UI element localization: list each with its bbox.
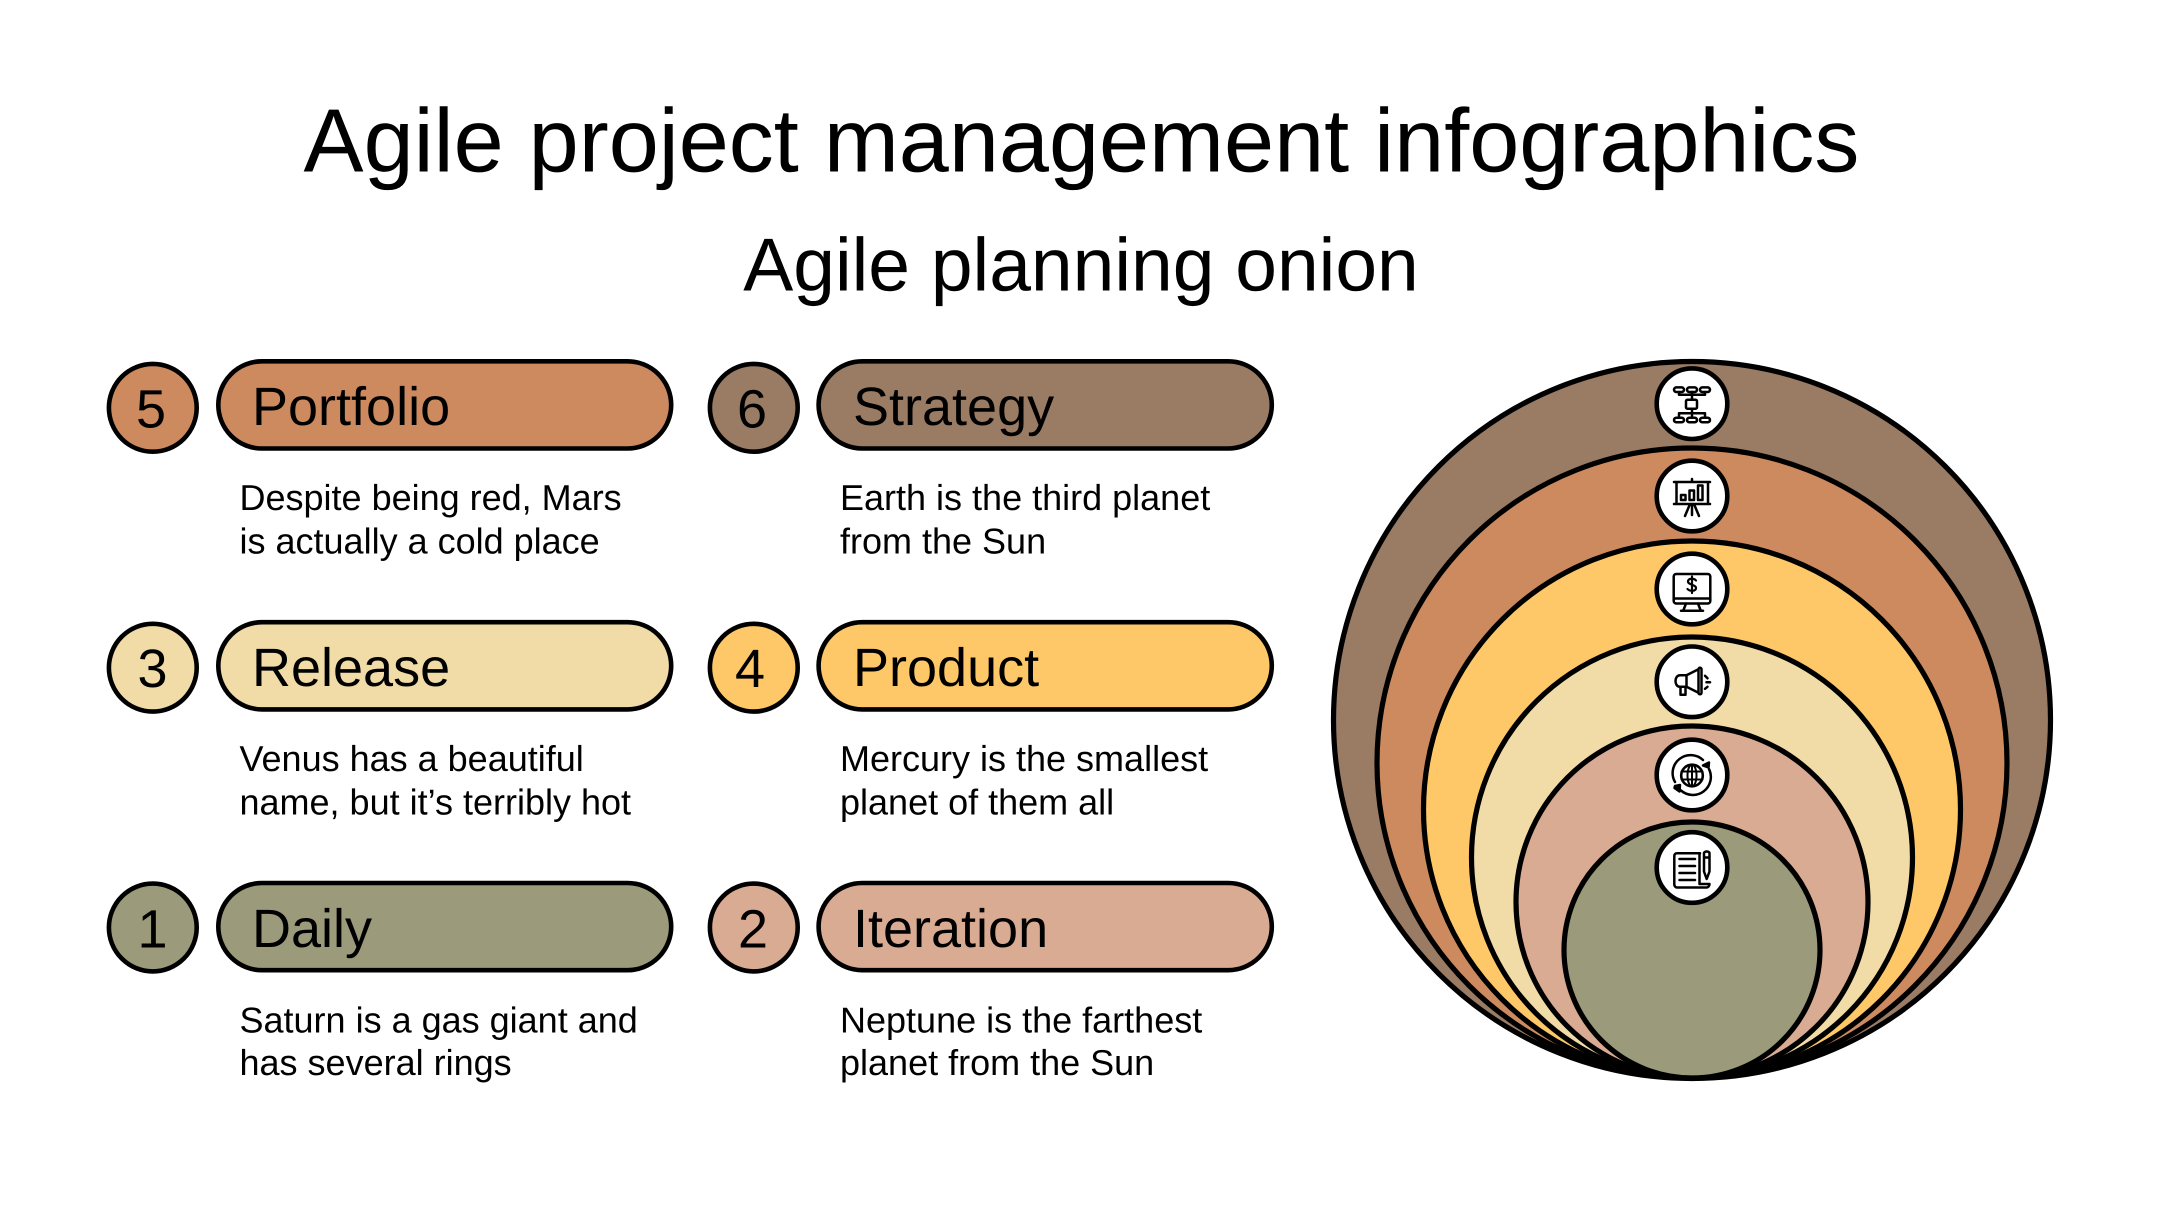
number badge 4: 4	[735, 639, 765, 699]
number badge 5: 5	[136, 380, 166, 440]
number badge 4	[710, 624, 798, 712]
panel: release item	[109, 622, 671, 822]
number badge 2	[710, 884, 798, 971]
number badge 2: 2	[738, 899, 768, 959]
pill: Strategy	[819, 361, 1272, 448]
text: Strategy description: from the Sun	[840, 520, 1046, 562]
chart: planning onion	[1334, 362, 2050, 1078]
pill: Portfolio	[218, 361, 671, 448]
text: Iteration description: Neptune is the farthest	[840, 1000, 1202, 1040]
text: Release description: Venus has a beautiful	[240, 738, 584, 779]
text: Product description: planet of them all	[840, 781, 1114, 822]
panel: iteration item	[710, 883, 1272, 1083]
number badge 1: 1	[137, 899, 168, 959]
title: Agile project management infographics	[304, 92, 1859, 192]
text: Strategy description: Earth is the third planet	[840, 477, 1210, 518]
icon: globe with cycle arrows	[1657, 740, 1727, 810]
pill: Release	[218, 622, 671, 709]
pill: Release: Release	[252, 638, 450, 698]
number badge 1	[109, 884, 197, 971]
icon: presentation board	[1657, 461, 1727, 531]
layer: daily	[1564, 822, 1820, 1078]
subtitle: Agile planning onion	[743, 222, 1419, 306]
text: Iteration description: planet from the Sun	[840, 1042, 1154, 1083]
icon: strategy network	[1657, 368, 1727, 439]
text: Release description: name, but it’s terribly hot	[240, 781, 631, 822]
layer: product	[1424, 541, 1960, 1078]
text: Portfolio description: Despite being red, Mars	[240, 477, 622, 518]
pill: Product	[819, 622, 1272, 709]
number badge 6: 6	[737, 380, 767, 440]
text: Daily description: has several rings	[240, 1042, 512, 1083]
text: Product description: Mercury is the smallest	[840, 738, 1208, 779]
text: Portfolio description: is actually a cold place	[240, 520, 600, 562]
number badge 3	[109, 624, 197, 712]
icon: document and pencil	[1657, 832, 1727, 903]
number badge 3: 3	[137, 639, 168, 699]
pill: Strategy: Strategy	[853, 377, 1054, 437]
number badge 6	[710, 364, 798, 452]
icon: megaphone	[1657, 646, 1727, 717]
number badge 5	[109, 364, 197, 452]
panel: product item	[710, 622, 1272, 822]
icon: monitor with dollar	[1657, 554, 1727, 624]
pill: Daily	[218, 883, 671, 970]
layer: portfolio	[1377, 448, 2007, 1078]
pill: Product: Product	[853, 638, 1039, 698]
text: Daily description: Saturn is a gas giant and	[240, 1000, 638, 1040]
pill: Portfolio: Portfolio	[252, 377, 450, 437]
panel: portfolio item	[109, 361, 671, 562]
layer: strategy	[1334, 362, 2050, 1078]
layer: release	[1472, 637, 1912, 1078]
panel: strategy item	[710, 361, 1272, 562]
layer: iteration	[1516, 726, 1868, 1078]
pill: Daily: Daily	[252, 899, 372, 959]
panel: daily item	[109, 883, 671, 1083]
pill: Iteration	[819, 883, 1272, 970]
pill: Iteration: Iteration	[853, 899, 1048, 959]
